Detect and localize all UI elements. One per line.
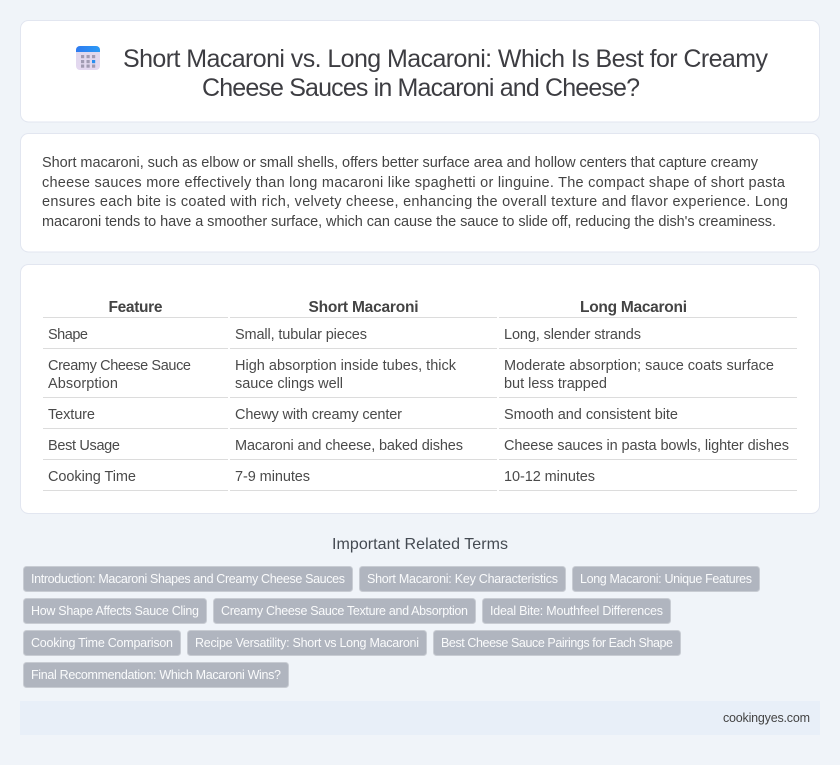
text block: intro: Short macaroni, such as elbow or small shells, offers better surface area and hollow centers that capture creamy [42,155,759,171]
tag: Introduction: Macaroni Shapes and Creamy Cheese Sauces [31,572,345,586]
row: creamy cheese sauce absorption: but less trapped [504,376,607,392]
text block: intro [42,155,788,230]
tag: How Shape Affects Sauce Cling [31,604,199,618]
table header [108,299,687,316]
row: texture: Smooth and consistent bite [504,407,678,423]
row: cooking time: 10-12 minutes [504,469,595,485]
title [123,45,768,102]
text block: intro: cheese sauces more effectively than long macaroni like spaghetti or linguine. The compact shape of short pasta [42,175,786,191]
table header: Short Macaroni [308,299,418,316]
header panel [20,20,820,122]
row: creamy cheese sauce absorption: Absorption [48,376,118,392]
row: best usage: Cheese sauces in pasta bowls, lighter dishes [504,438,789,454]
tag [572,566,760,592]
panel: comparison table [20,264,820,514]
text block: intro: macaroni tends to have a smoother surface, which can cause the sauce to slide off, reducing the dish's creaminess. [42,214,776,230]
tag [188,630,426,656]
row: best usage: Macaroni and cheese, baked dishes [235,438,463,454]
row: shape [48,327,641,343]
row: cooking time: 7-9 minutes [235,469,310,485]
tag: Ideal Bite: Mouthfeel Differences [490,604,663,618]
tag: Short Macaroni: Key Characteristics [367,572,558,586]
heading: important related terms: Important Related Terms [332,536,508,553]
footer: cookingyes.com [723,711,810,725]
tag: Best Cheese Sauce Pairings for Each Shape [441,636,673,650]
row: creamy cheese sauce absorption: High absorption inside tubes, thick [235,358,457,374]
row: texture: Chewy with creamy center [235,407,402,423]
tag [434,630,680,656]
tag: Long Macaroni: Unique Features [580,572,752,586]
table header: Feature [108,299,163,316]
tag: Cooking Time Comparison [31,636,173,650]
tag [360,566,566,592]
panel: intro paragraph [20,134,820,252]
tag: Creamy Cheese Sauce Texture and Absorption [221,604,468,618]
row: shape: Long, slender strands [504,327,641,343]
table header: Long Macaroni [580,299,687,316]
row: texture [48,407,678,423]
tag: Final Recommendation: Which Macaroni Wins? [31,668,281,682]
row: creamy cheese sauce absorption: Creamy Cheese Sauce [48,358,191,374]
row: best usage: Best Usage [48,438,120,454]
row: shape: Shape [48,327,88,343]
row: shape: Small, tubular pieces [235,327,367,343]
panel: related term tags [24,566,760,688]
tag [214,598,476,624]
tag: Recipe Versatility: Short vs Long Macaroni [195,636,419,650]
row: creamy cheese sauce absorption [48,358,774,392]
title: Short Macaroni vs. Long Macaroni: Which Is Best for Creamy [123,45,768,73]
tag [24,566,352,592]
row: best usage [48,438,789,454]
text block: intro: ensures each bite is coated with rich, velvety cheese, enhancing the overall texture and flavor experience. Long [42,194,788,210]
tag [24,598,206,624]
row: cooking time: Cooking Time [48,469,136,485]
footer [20,701,820,735]
tag [24,630,180,656]
icon: calendar [76,46,100,70]
tag [482,598,670,624]
tag [24,662,288,688]
row: creamy cheese sauce absorption: Moderate absorption; sauce coats surface [504,358,774,374]
row: texture: Texture [48,407,95,423]
row: creamy cheese sauce absorption: sauce clings well [235,376,343,392]
row: cooking time [48,469,595,485]
title: Cheese Sauces in Macaroni and Cheese? [202,74,640,102]
